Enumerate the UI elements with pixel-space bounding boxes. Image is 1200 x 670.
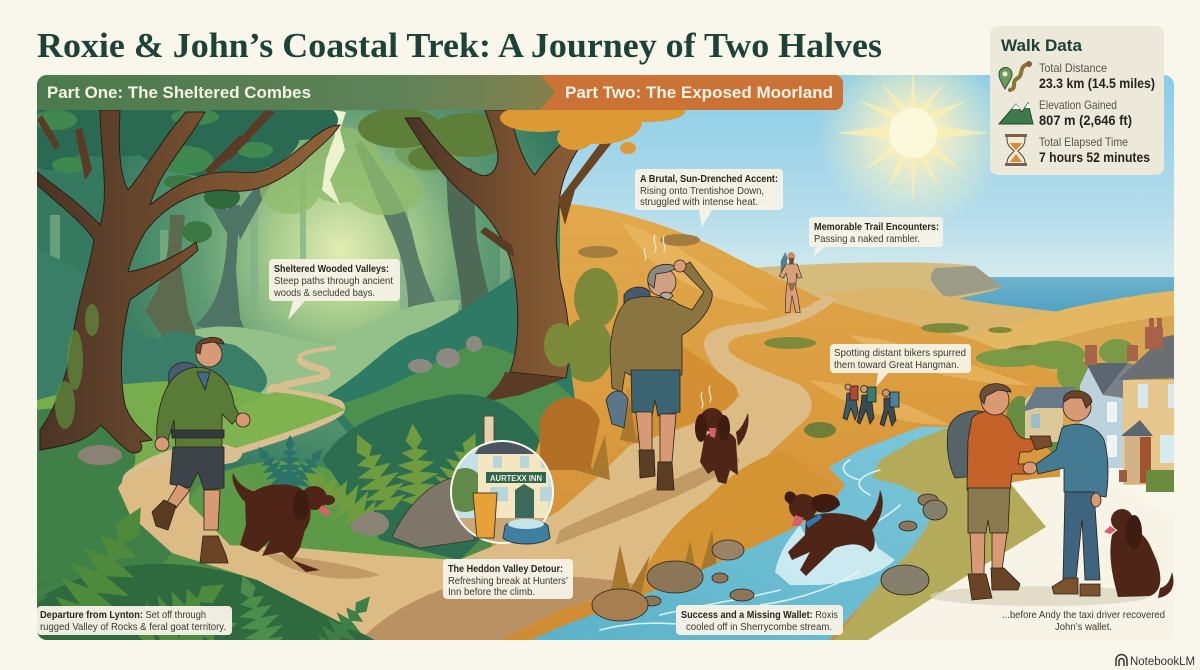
dog water bowl [503, 519, 550, 544]
second hill [822, 288, 1056, 338]
pale background trees [50, 201, 510, 310]
dark left canopy [37, 110, 338, 176]
icon: route with pin [999, 61, 1032, 90]
tree: left distant trunk [145, 215, 196, 336]
callout: The Heddon Valley Detour: The Heddon Valley Detour: [448, 563, 563, 575]
rocks on the bank [408, 336, 482, 373]
hiker: John in forest [152, 337, 250, 563]
left oak branch ends [37, 110, 275, 180]
far headland [756, 262, 1002, 298]
mossy mid-ground [343, 344, 572, 438]
stream [520, 427, 950, 645]
moor scrub [561, 234, 1058, 438]
grass meadow [37, 381, 266, 467]
stat: total elapsed time [1039, 135, 1150, 165]
callout: taxi driver recovers the wallet: ...before Andy the taxi driver recovered [1002, 609, 1165, 621]
stat: total distance [1039, 61, 1155, 91]
rightside dark tree root [478, 372, 566, 403]
orange trailside bank [644, 452, 804, 580]
upper orange bank [622, 345, 738, 445]
icon: hourglass [1005, 134, 1027, 166]
callout: Departure from Lynton [37, 606, 232, 635]
sky [560, 75, 1174, 277]
stat: total distance: Total Distance [1039, 61, 1107, 75]
tree: centre trunk [195, 160, 284, 328]
heading: walk data: Walk Data [1001, 36, 1083, 55]
right bushes [326, 276, 575, 432]
stat: elevation gained: Elevation Gained [1039, 98, 1117, 112]
trail shadows [260, 450, 740, 579]
callout: A Brutal, Sun-Drenched Accent: A Brutal, Sun-Drenched Accent: [640, 173, 778, 185]
header bar: part two [540, 75, 843, 110]
tree: centre right trunk [355, 140, 436, 308]
callout: The Heddon Valley Detour: Refreshing break at Hunters’ [448, 575, 568, 587]
callout: Memorable Trail Encounters [809, 217, 943, 257]
grass wedge by hiker [210, 392, 345, 448]
house: blue house [1080, 345, 1138, 468]
naked rambler [779, 252, 802, 313]
fern: blue-green bush [248, 435, 332, 497]
dog: Roxie splashing in stream [785, 490, 883, 576]
forest backdrop [37, 75, 570, 470]
main moor [480, 203, 1060, 650]
tree: right oak side branch [480, 227, 515, 258]
village tree line [976, 339, 1135, 456]
tree: large left oak [37, 110, 340, 453]
cream road [860, 476, 1180, 645]
lit hillside bands [620, 222, 1030, 425]
icon: inn medallion [445, 416, 556, 544]
brand mark: NotebookLM: NotebookLM [1130, 656, 1195, 668]
tree: dark trunk [446, 168, 488, 310]
callout: Departure from Lynton: Departure from Lynton: Set off through [40, 609, 206, 621]
icon: inn medallion: AURTEXX INN [490, 474, 542, 483]
callout: distant bikers [830, 344, 971, 387]
stat: total elapsed time: 7 hours 52 minutes [1039, 149, 1150, 165]
stream rocks [592, 494, 947, 621]
callout: Sheltered Wooded Valleys: woods & secluded bays. [273, 287, 375, 299]
tree: large right oak [405, 110, 598, 378]
grass beside stream [830, 428, 1046, 645]
left dark bushes [50, 255, 267, 393]
callout: Success and a Missing Wallet: Success and a Missing Wallet: Roxis [681, 609, 838, 621]
stream highlights [600, 460, 900, 630]
light gap in canopy [322, 110, 346, 205]
pint glass [473, 493, 497, 538]
tree: right oak upper limb [558, 130, 618, 225]
splash [775, 525, 895, 585]
callout: Success and a Missing Wallet [676, 605, 843, 635]
callout: taxi driver recovers the wallet [1002, 609, 1165, 633]
grassy patch by ferns [189, 460, 459, 560]
dog: Roxie on trail [232, 473, 335, 572]
dark bushes centre [322, 394, 540, 560]
distant bikers [843, 384, 899, 426]
hiker: John with hand on head [606, 260, 712, 490]
callout: A Brutal, Sun-Drenched Accent [635, 169, 783, 227]
olive right canopy [358, 110, 497, 170]
stat: total elapsed time: Total Elapsed Time [1039, 135, 1128, 149]
main trail [118, 295, 838, 640]
winding forest path [135, 348, 338, 482]
panel: illustrated trail scene [37, 75, 1174, 640]
callout: taxi driver recovers the wallet: John’s wallet. [1055, 621, 1112, 633]
heading: part two: Part Two: The Exposed Moorland [565, 84, 833, 102]
callout: distant bikers: Spotting distant bikers spurred [834, 347, 966, 359]
callout: Memorable Trail Encounters: Passing a naked rambler. [814, 233, 920, 245]
sea [958, 277, 1174, 312]
ferns: centre [292, 422, 493, 538]
orange bush [540, 397, 600, 470]
house: left cottage [1022, 387, 1075, 442]
callout: The Heddon Valley Detour [443, 559, 573, 599]
title: Roxie & John’s Coastal Trek: A Journey of Two Halves [37, 26, 882, 65]
hiker: John shaking hands [947, 384, 1052, 600]
icon: mountains [999, 103, 1033, 124]
panel: section header bars [37, 75, 843, 110]
ferns: bottom left [0, 490, 384, 670]
grey boulder [392, 478, 475, 548]
heat lines [644, 235, 711, 408]
lower hill band [1044, 316, 1174, 426]
ground undergrowth left [37, 408, 172, 610]
small rocks [78, 445, 389, 536]
left oak moss [55, 304, 99, 429]
village [1022, 318, 1180, 492]
taxi driver Andy [1036, 391, 1108, 596]
trailside reeds [576, 400, 716, 594]
dog: Roxie by hiker [695, 408, 749, 484]
header bar: part one [37, 75, 555, 110]
callout: A Brutal, Sun-Drenched Accent: Rising onto Trentishoe Down, [640, 185, 764, 197]
autumn bushes [544, 323, 576, 367]
light canopy [260, 127, 465, 215]
stat: elevation gained [1039, 98, 1132, 128]
panel: walk data [990, 26, 1164, 175]
stat: elevation gained: 807 m (2,646 ft) [1039, 112, 1132, 128]
ground base [37, 470, 492, 640]
callout: Sheltered Wooded Valleys [269, 259, 400, 320]
callout: The Heddon Valley Detour: Inn before the climb. [448, 586, 535, 598]
callout: Sheltered Wooded Valleys: Sheltered Wooded Valleys: [274, 263, 389, 275]
headland cliff [931, 266, 1002, 298]
dog: Roxie sitting [1104, 509, 1173, 598]
ground shadow [930, 586, 1150, 606]
house: cream terrace [1118, 318, 1180, 492]
icon: sun [825, 75, 991, 217]
brown soil foreground [360, 576, 640, 640]
stat: total distance: 23.3 km (14.5 miles) [1039, 75, 1155, 91]
callout: Sheltered Wooded Valleys: Steep paths through ancient [274, 275, 393, 287]
grass fringe bottom [37, 564, 375, 640]
right golden hill [968, 290, 1174, 350]
callout: A Brutal, Sun-Drenched Accent: struggled with intense heat. [640, 196, 758, 208]
orange foliage [500, 100, 685, 154]
callout: Memorable Trail Encounters: Memorable Trail Encounters: [814, 221, 939, 233]
callout: Success and a Missing Wallet: cooled off in Sherrycombe stream. [686, 621, 832, 633]
valley floor meadow [195, 300, 460, 396]
green leaf clusters [33, 109, 273, 243]
heading: part one: Part One: The Sheltered Combes [47, 84, 311, 102]
callout: distant bikers: them toward Great Hangman. [834, 359, 959, 371]
callout: Departure from Lynton: rugged Valley of Rocks & feral goat territory. [40, 621, 226, 633]
